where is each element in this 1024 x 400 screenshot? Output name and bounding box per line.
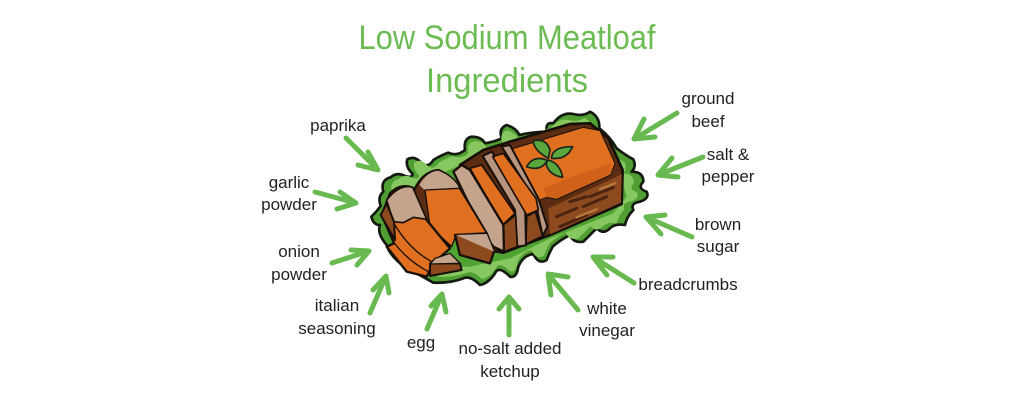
label: white vinegar: white <box>586 299 627 318</box>
middle slice orange <box>425 188 487 247</box>
arrow: brown sugar <box>646 215 692 237</box>
end slice crust <box>381 203 395 240</box>
label: paprika: paprika <box>310 116 366 135</box>
arrow: italian seasoning <box>370 276 389 313</box>
label: onion powder: onion <box>278 242 320 261</box>
middle slice crust <box>455 233 494 263</box>
lettuce inner shade <box>390 128 627 268</box>
arrow: garlic powder <box>315 192 356 209</box>
glaze shade <box>543 163 611 198</box>
lettuce <box>371 112 647 285</box>
label: egg: egg <box>407 333 435 352</box>
label: italian seasoning: italian <box>315 296 359 315</box>
label: breadcrumbs: breadcrumbs <box>638 275 738 294</box>
label: italian seasoning: seasoning <box>298 319 376 338</box>
label: ground beef: beef <box>691 112 725 131</box>
curved slice lines <box>393 225 432 272</box>
middle slice <box>412 170 493 252</box>
basil leaves <box>527 140 573 177</box>
big cut face <box>453 165 504 252</box>
title <box>358 19 656 100</box>
small slice face <box>430 253 460 264</box>
arrow: onion powder <box>332 250 369 265</box>
middle slice crust top <box>456 234 494 252</box>
middle slice tan <box>419 171 459 191</box>
illustration: sliced meatloaf on lettuce <box>371 112 647 285</box>
label: garlic powder: powder <box>261 195 317 214</box>
end slice <box>382 186 450 277</box>
small slice crust <box>430 263 462 276</box>
loaf crust side <box>548 174 622 234</box>
loaf crust texture <box>557 187 613 227</box>
label: no-salt added ketchup: no-salt added <box>458 339 562 358</box>
glaze top <box>508 127 615 201</box>
label: brown sugar: sugar <box>697 237 740 256</box>
title: Low Sodium Meatloaf <box>358 19 656 57</box>
arrow: white vinegar <box>548 274 578 310</box>
slice orange segment <box>470 165 515 225</box>
arrow: egg <box>427 294 446 329</box>
arrow: breadcrumbs <box>593 257 634 283</box>
label: onion powder: powder <box>271 265 327 284</box>
label: salt and pepper: salt & <box>707 145 750 164</box>
label: no-salt added ketchup: ketchup <box>480 362 540 381</box>
title: Ingredients <box>426 62 588 100</box>
label: brown sugar: brown <box>695 215 741 234</box>
brown slice sides <box>503 212 543 252</box>
label: ground beef: ground <box>682 89 734 108</box>
arrow: salt and pepper <box>658 157 703 177</box>
arrow: ground beef <box>634 113 677 139</box>
third slice <box>502 145 547 236</box>
label: white vinegar: vinegar <box>579 321 635 340</box>
lettuce highlight <box>381 118 638 279</box>
slice orange segment <box>493 153 538 215</box>
end slice face <box>387 187 427 223</box>
arrow: ketchup <box>499 297 519 335</box>
fourth slice <box>483 152 526 247</box>
arrows <box>315 113 703 335</box>
label: salt and pepper: pepper <box>702 167 755 186</box>
label: garlic powder: garlic <box>269 173 310 192</box>
arrow: paprika <box>346 138 378 170</box>
labels <box>261 89 755 381</box>
loaf body <box>460 123 623 253</box>
